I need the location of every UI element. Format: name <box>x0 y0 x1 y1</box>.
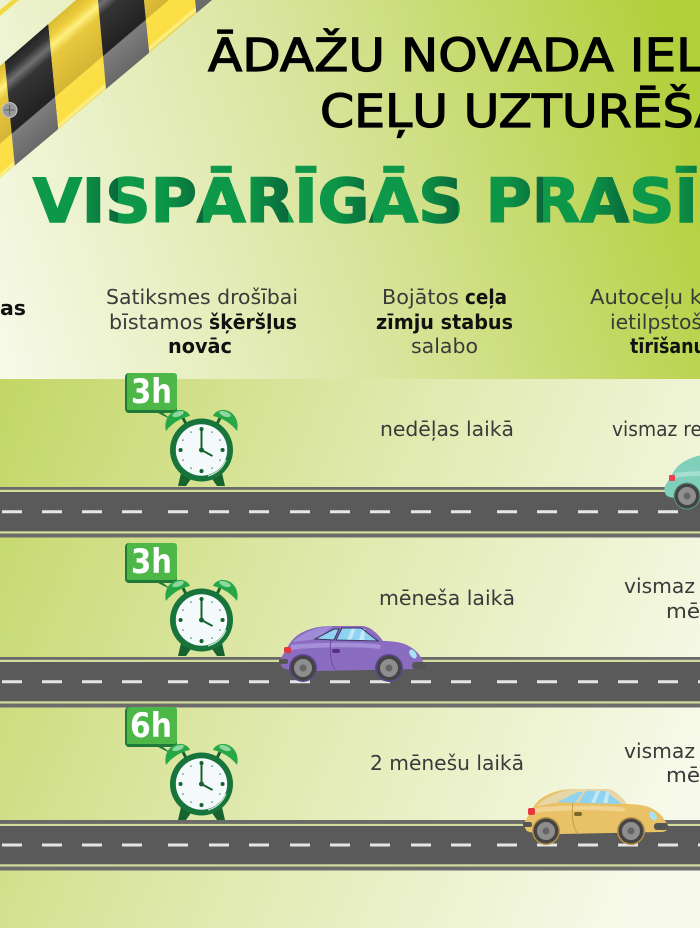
row 3 texts: 2 mēnešu laikā <box>370 751 524 775</box>
row 1 texts: nedēļas laikā <box>380 417 514 441</box>
row 2 texts: mē <box>666 599 700 623</box>
column header: obstacles: novāc <box>168 334 232 358</box>
background: upper header area <box>0 0 700 379</box>
column header: cleaning: ietilpstoš <box>610 310 700 334</box>
badge: 6h: 6h <box>130 706 172 746</box>
column header: road sign posts: salabo <box>411 334 478 358</box>
icon: screw <box>2 102 17 118</box>
road barrier: striped metal guard rail <box>0 0 212 178</box>
column header: obstacles: šķēršļus <box>209 310 297 334</box>
car: teal <box>664 454 700 510</box>
badge: 3h: 3h <box>131 372 172 412</box>
row 1 texts <box>380 417 700 441</box>
icon: alarm clock <box>165 580 238 656</box>
icon: alarm clock <box>165 744 238 820</box>
title: ĀDAŽU NOVADA IEL <box>208 29 700 82</box>
clock with 3h badge, row 2 <box>125 542 238 656</box>
row 3 texts: vismaz <box>624 739 695 763</box>
column header: road sign posts: ceļa <box>465 285 507 309</box>
row 2 texts <box>379 574 700 623</box>
title: CEĻU UZTURĒŠA <box>320 85 700 138</box>
row 3 texts <box>370 739 700 787</box>
row 2 texts: vismaz <box>624 574 695 598</box>
badge: 3h: 3h <box>131 542 172 582</box>
column header: partial left column: as <box>0 296 26 320</box>
icon: alarm clock <box>165 410 238 486</box>
column header: obstacles <box>106 285 298 358</box>
clock with 6h badge, row 3 <box>125 706 238 820</box>
column header: obstacles: bīstamos <box>109 310 203 334</box>
column header: road sign posts: zīmju stabus <box>376 310 513 334</box>
column header: obstacles: Satiksmes drošībai <box>106 285 298 309</box>
title <box>208 29 700 138</box>
column header: cleaning <box>590 285 700 358</box>
car: yellow <box>523 789 668 845</box>
row 3 texts: mē <box>666 763 700 787</box>
road 1 <box>0 487 700 538</box>
clock with 3h badge, row 1 <box>125 372 238 486</box>
column header: road sign posts <box>376 285 513 358</box>
heading: general requirements: VISPĀRĪGĀS PRASĪ <box>33 166 698 237</box>
column header: cleaning: Autoceļu k <box>590 285 700 309</box>
column header: road sign posts: Bojātos <box>382 285 459 309</box>
car: purple <box>279 626 426 682</box>
road 2 <box>0 657 700 708</box>
background: lower rows area <box>0 379 700 928</box>
row 2 texts: mēneša laikā <box>379 586 515 610</box>
road 3 <box>0 820 700 870</box>
